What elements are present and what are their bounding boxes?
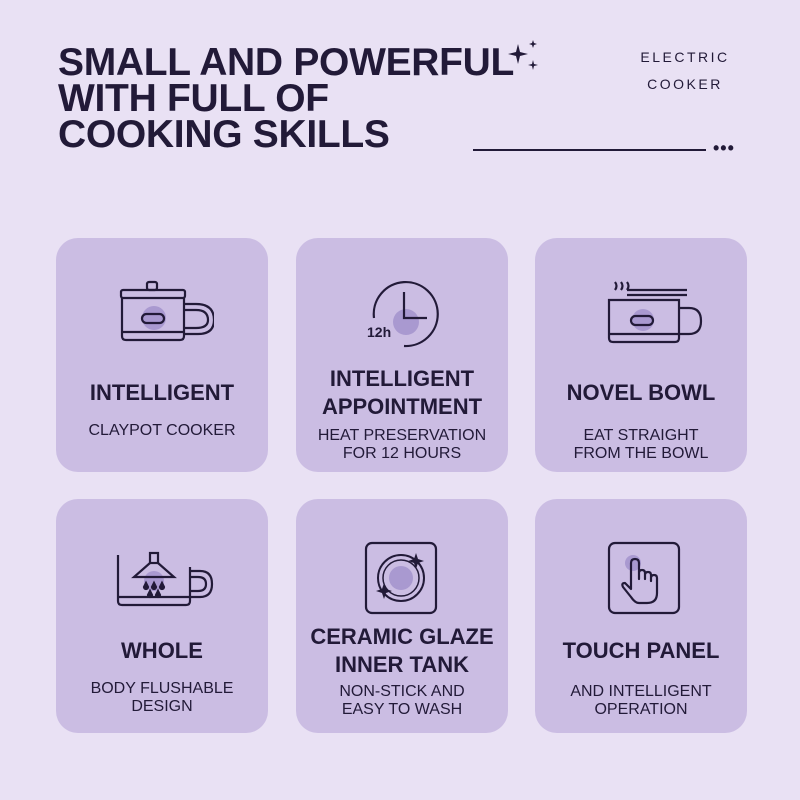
card: novel bowl: FROM THE BOWL (574, 445, 708, 462)
tag: electric cooker (640, 49, 730, 92)
title: COOKING SKILLS (58, 113, 390, 156)
card: intelligent claypot (56, 238, 268, 472)
icon: sparkles (508, 40, 538, 70)
card: intelligent appointment: INTELLIGENT (330, 366, 474, 391)
title: WITH FULL OF (58, 77, 329, 120)
card: touch panel: OPERATION (594, 701, 688, 718)
card: ceramic glaze: CERAMIC GLAZE (310, 624, 494, 649)
card: touch panel: TOUCH PANEL (563, 638, 719, 663)
text: ••• (713, 138, 735, 158)
tag: electric cooker: COOKER (647, 76, 723, 92)
card: intelligent appointment (296, 238, 508, 472)
card: whole: BODY FLUSHABLE (91, 680, 233, 697)
title: SMALL AND POWERFUL (58, 41, 514, 84)
icon: clock 12h (367, 281, 439, 348)
card: ceramic glaze: EASY TO WASH (342, 701, 462, 718)
card: touch panel (535, 499, 747, 733)
icon: glaze (364, 542, 438, 614)
card: whole: DESIGN (131, 698, 193, 715)
icon: clock 12h: 12h (367, 324, 391, 340)
card: intelligent appointment: APPOINTMENT (322, 394, 482, 419)
card: novel bowl (535, 238, 747, 472)
card: intelligent appointment: HEAT PRESERVATION (318, 427, 486, 444)
title (58, 41, 514, 156)
icon: bowl with steam (608, 281, 702, 344)
card: ceramic glaze: INNER TANK (335, 652, 469, 677)
icon: flushable pot (116, 552, 214, 606)
card: intelligent claypot: INTELLIGENT (90, 380, 234, 405)
card: intelligent claypot: CLAYPOT COOKER (88, 422, 236, 439)
card: ceramic glaze: NON-STICK AND (339, 683, 465, 700)
card: touch panel: AND INTELLIGENT (570, 683, 712, 700)
card: whole (56, 499, 268, 733)
card: ceramic glaze (296, 499, 508, 733)
tag: electric cooker: ELECTRIC (640, 49, 730, 65)
icon: pot (120, 280, 214, 342)
icon: touch (608, 542, 680, 614)
card: whole: WHOLE (121, 638, 203, 663)
card: novel bowl: NOVEL BOWL (567, 380, 715, 405)
card: novel bowl: EAT STRAIGHT (584, 427, 698, 444)
card: intelligent appointment: FOR 12 HOURS (343, 445, 461, 462)
